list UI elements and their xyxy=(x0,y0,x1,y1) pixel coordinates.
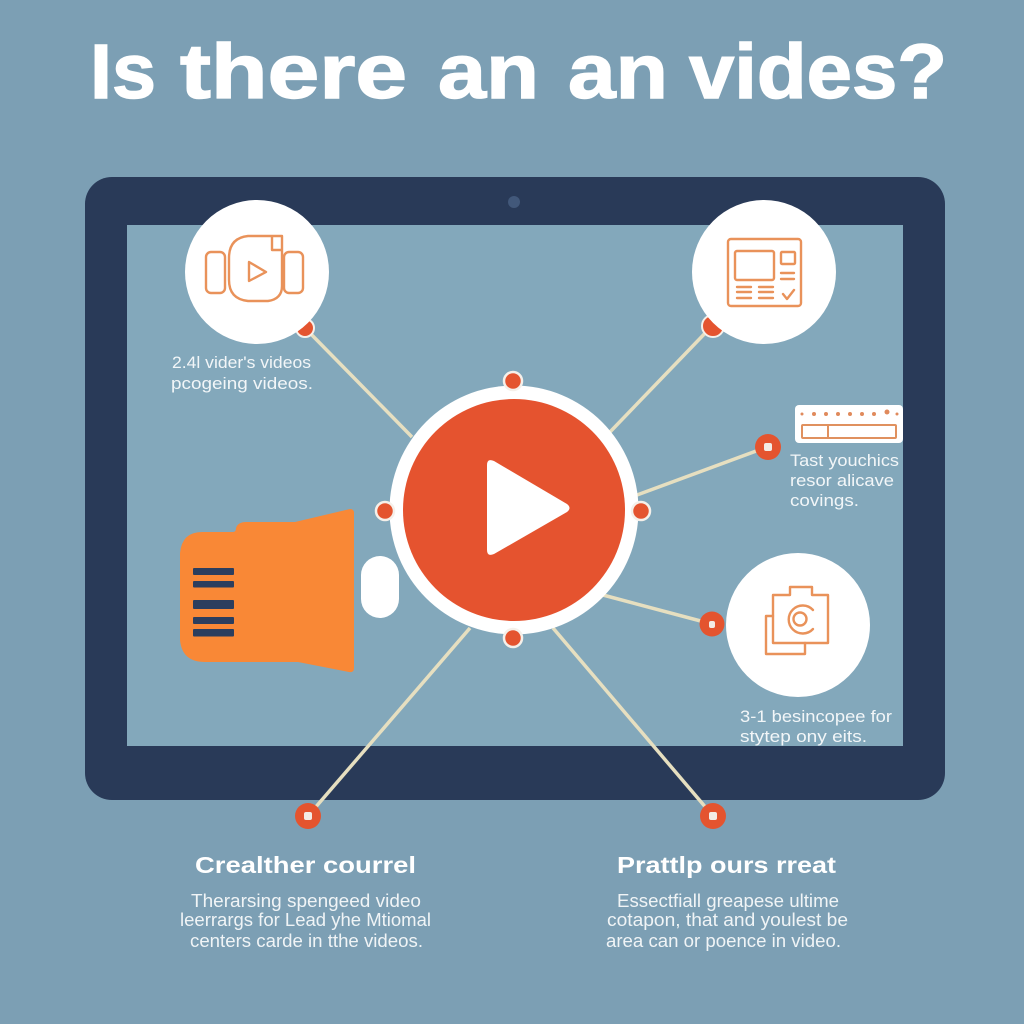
body: Therarsing spengeed video xyxy=(191,891,421,911)
icon: camera copies xyxy=(766,587,828,654)
icon circle: layout xyxy=(692,200,836,344)
label: right xyxy=(790,451,899,510)
label: right: resor alicave xyxy=(790,471,894,490)
slider bar xyxy=(802,425,896,438)
white pill xyxy=(361,556,399,618)
center node: top xyxy=(504,372,522,390)
bottom node: left xyxy=(295,803,321,829)
label: lower right: 3-1 besincopee for xyxy=(740,707,892,726)
label: right: Tast youchics xyxy=(790,451,899,470)
body: Essectfiall greapese ultime xyxy=(617,891,839,911)
node: right xyxy=(755,434,781,460)
memory card xyxy=(180,509,354,672)
heading: Prattlp ours rreat xyxy=(617,852,836,878)
body: centers carde in tthe videos. xyxy=(190,931,423,951)
bottom block: left xyxy=(180,852,431,951)
icon: page layout xyxy=(728,239,801,306)
node: top right xyxy=(702,315,724,337)
title: there xyxy=(180,29,407,115)
node: lower right xyxy=(700,612,724,636)
title: Is xyxy=(90,29,156,115)
icon circle: camera xyxy=(726,553,870,697)
body xyxy=(180,891,431,951)
title: an xyxy=(568,29,668,115)
bottom node: right xyxy=(700,803,726,829)
connector lines xyxy=(305,326,767,816)
center node: right xyxy=(632,502,650,520)
label: right: covings. xyxy=(790,491,859,510)
label: lower right xyxy=(740,707,892,746)
slider dots xyxy=(800,410,898,416)
icon: video reel xyxy=(206,236,303,301)
label: top left: pcogeing videos. xyxy=(171,374,313,393)
center node: bottom xyxy=(504,629,522,647)
title xyxy=(90,29,947,115)
slider widget xyxy=(795,405,903,443)
body: area can or poence in video. xyxy=(606,931,841,951)
heading: Crealther courrel xyxy=(195,852,416,878)
body: leerrargs for Lead yhe Mtiomal xyxy=(180,910,431,930)
label: lower right: stytep ony eits. xyxy=(740,727,867,746)
label: top left: 2.4l vider's videos xyxy=(172,353,311,372)
body xyxy=(606,891,848,951)
node: top left xyxy=(296,319,314,337)
icon: play triangle xyxy=(487,460,570,555)
bottom block: right xyxy=(606,852,848,951)
card contacts xyxy=(193,568,234,636)
icon circle: video xyxy=(185,200,329,344)
center play button xyxy=(390,386,638,634)
title: vides? xyxy=(689,29,947,115)
tablet device xyxy=(85,177,945,800)
center node: left xyxy=(376,502,394,520)
body: cotapon, that and youlest be xyxy=(607,910,848,930)
title: an xyxy=(438,29,539,115)
label: top left xyxy=(171,353,313,393)
